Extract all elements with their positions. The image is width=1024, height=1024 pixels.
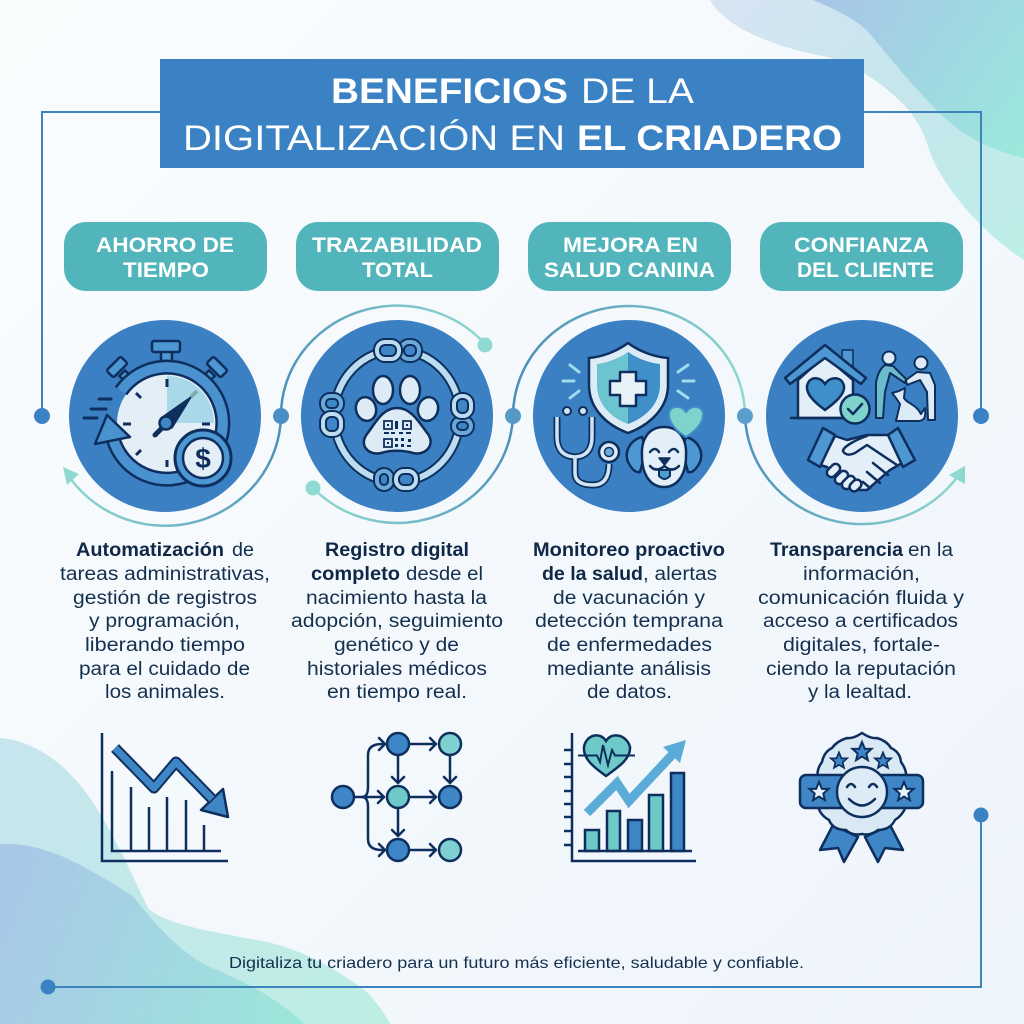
title: EL CRIADERO: [577, 119, 842, 158]
check badge: [840, 394, 870, 424]
text block: confianza: comunicación fluida y: [758, 588, 965, 609]
text block: trazabilidad: historiales médicos: [307, 659, 487, 680]
text block: salud: de enfermedades: [547, 635, 712, 656]
text block: trazabilidad: en tiempo real.: [327, 682, 467, 703]
text block: confianza: digitales, fortale-: [783, 635, 940, 656]
chain ring: [334, 350, 460, 482]
background wave: bottom left dark: [0, 844, 305, 1024]
background wave: top right light: [710, 0, 1024, 260]
text block: salud: detección temprana: [535, 611, 723, 632]
text block: confianza: y la lealtad.: [808, 682, 912, 703]
text block: ahorro de tiempo: liberando tiempo: [85, 635, 245, 656]
text block: ahorro de tiempo: [60, 540, 270, 703]
pill: mejora en salud canina: [528, 222, 731, 291]
text block: trazabilidad: Registro digital: [325, 540, 469, 561]
connector arc: circle 2 top: [281, 306, 485, 416]
chain links: [323, 342, 471, 488]
pill: ahorro de tiempo: AHORRO DE: [96, 234, 234, 257]
frame connector: bottom: [48, 815, 981, 987]
house: [842, 350, 853, 372]
circle icon: stopwatch: [69, 320, 261, 512]
title: [160, 59, 864, 168]
text block: confianza: información,: [803, 564, 920, 585]
text block: salud: de la salud: [542, 564, 643, 585]
connector dots: [34, 338, 989, 994]
paw: [353, 376, 441, 454]
text block: ahorro de tiempo: de: [232, 540, 254, 561]
speed lines: [84, 399, 111, 418]
icon: traceability flow network: [332, 733, 461, 861]
footer text: Digitaliza tu criadero para un futuro más eficiente, saludable y confiable.: [229, 955, 804, 972]
elapsed wedge: [167, 376, 214, 423]
text block: ahorro de tiempo: gestión de registros: [73, 588, 257, 609]
cross: [610, 372, 646, 406]
text block: ahorro de tiempo: los animales.: [105, 682, 225, 703]
icon: satisfaction badge: [800, 733, 923, 862]
text block: trazabilidad: desde el: [406, 564, 483, 585]
small dog: [892, 388, 925, 421]
connector arc: circle 4 bottom with arrow: [745, 416, 965, 524]
connector arc: circle 3 top: [513, 306, 745, 416]
ring: [113, 367, 223, 479]
text block: trazabilidad: genético y de: [334, 635, 459, 656]
background wave: bottom left light: [0, 738, 390, 1024]
dog: [627, 437, 646, 472]
qr code: [384, 421, 411, 447]
pill: confianza del cliente: [760, 222, 963, 291]
pill: ahorro de tiempo: [64, 222, 267, 291]
connector arc: circle 2 bottom: [313, 416, 513, 523]
heart: [669, 407, 703, 437]
connector arc: circle 1 bottom with arrow: [63, 416, 281, 526]
text block: salud: , alertas: [643, 564, 717, 585]
text block: confianza: ciendo la reputación: [766, 659, 956, 680]
text block: salud: [533, 540, 725, 703]
needle: [161, 397, 191, 428]
text block: salud: mediante análisis: [547, 659, 711, 680]
text block: ahorro de tiempo: Automatización: [76, 540, 224, 561]
pill: confianza del cliente: CONFIANZA: [794, 234, 929, 257]
text block: confianza: en la: [908, 540, 953, 561]
people: [876, 352, 935, 420]
text block: trazabilidad: nacimiento hasta la: [306, 588, 487, 609]
text block: confianza: acceso a certificados: [763, 611, 958, 632]
text block: confianza: [758, 540, 965, 703]
coin: [175, 430, 231, 486]
text block: ahorro de tiempo: para el cuidado de: [79, 659, 250, 680]
pill: ahorro de tiempo: TIEMPO: [123, 259, 209, 282]
text block: salud: de vacunación y: [553, 588, 706, 609]
top and side buttons: [106, 341, 228, 382]
text block: trazabilidad: completo: [311, 564, 400, 585]
circle icon: stopwatch: $: [195, 443, 211, 474]
title: BENEFICIOS: [331, 72, 568, 111]
background wave: top right dark: [813, 0, 1024, 158]
pill: mejora en salud canina: MEJORA EN: [563, 234, 698, 257]
dial: [117, 373, 217, 473]
pill: trazabilidad total: [296, 222, 499, 291]
pill: trazabilidad total: TOTAL: [362, 259, 433, 282]
pill: confianza del cliente: DEL CLIENTE: [797, 259, 934, 282]
text block: trazabilidad: [291, 540, 503, 703]
pill: mejora en salud canina: SALUD CANINA: [544, 259, 715, 282]
frame connector: left: [42, 112, 160, 416]
icon: health growth chart: [564, 733, 696, 861]
icon: descending chart: [102, 733, 228, 861]
text block: confianza: Transparencia: [770, 540, 903, 561]
arrow head: [95, 415, 130, 444]
rays: [563, 365, 694, 398]
shield: [589, 343, 668, 433]
pill: trazabilidad total: TRAZABILIDAD: [312, 234, 482, 257]
text block: ahorro de tiempo: y programación,: [89, 611, 240, 632]
tick marks: [123, 379, 210, 467]
circle icon: home, people and handshake: [766, 320, 958, 512]
title: DIGITALIZACIÓN EN: [183, 119, 565, 158]
text block: salud: de datos.: [587, 682, 672, 703]
handshake: [820, 435, 902, 490]
house heart: [807, 378, 844, 410]
text block: salud: Monitoreo proactivo: [533, 540, 725, 561]
text block: trazabilidad: adopción, seguimiento: [291, 611, 503, 632]
circle icon: chain and paw: [301, 320, 493, 512]
stethoscope: [557, 417, 609, 485]
text block: ahorro de tiempo: tareas administrativas,: [60, 564, 270, 585]
title: DE LA: [581, 72, 695, 111]
circle icon: health shield, stethoscope and dog: [533, 320, 725, 512]
frame connector: right: [864, 112, 981, 416]
